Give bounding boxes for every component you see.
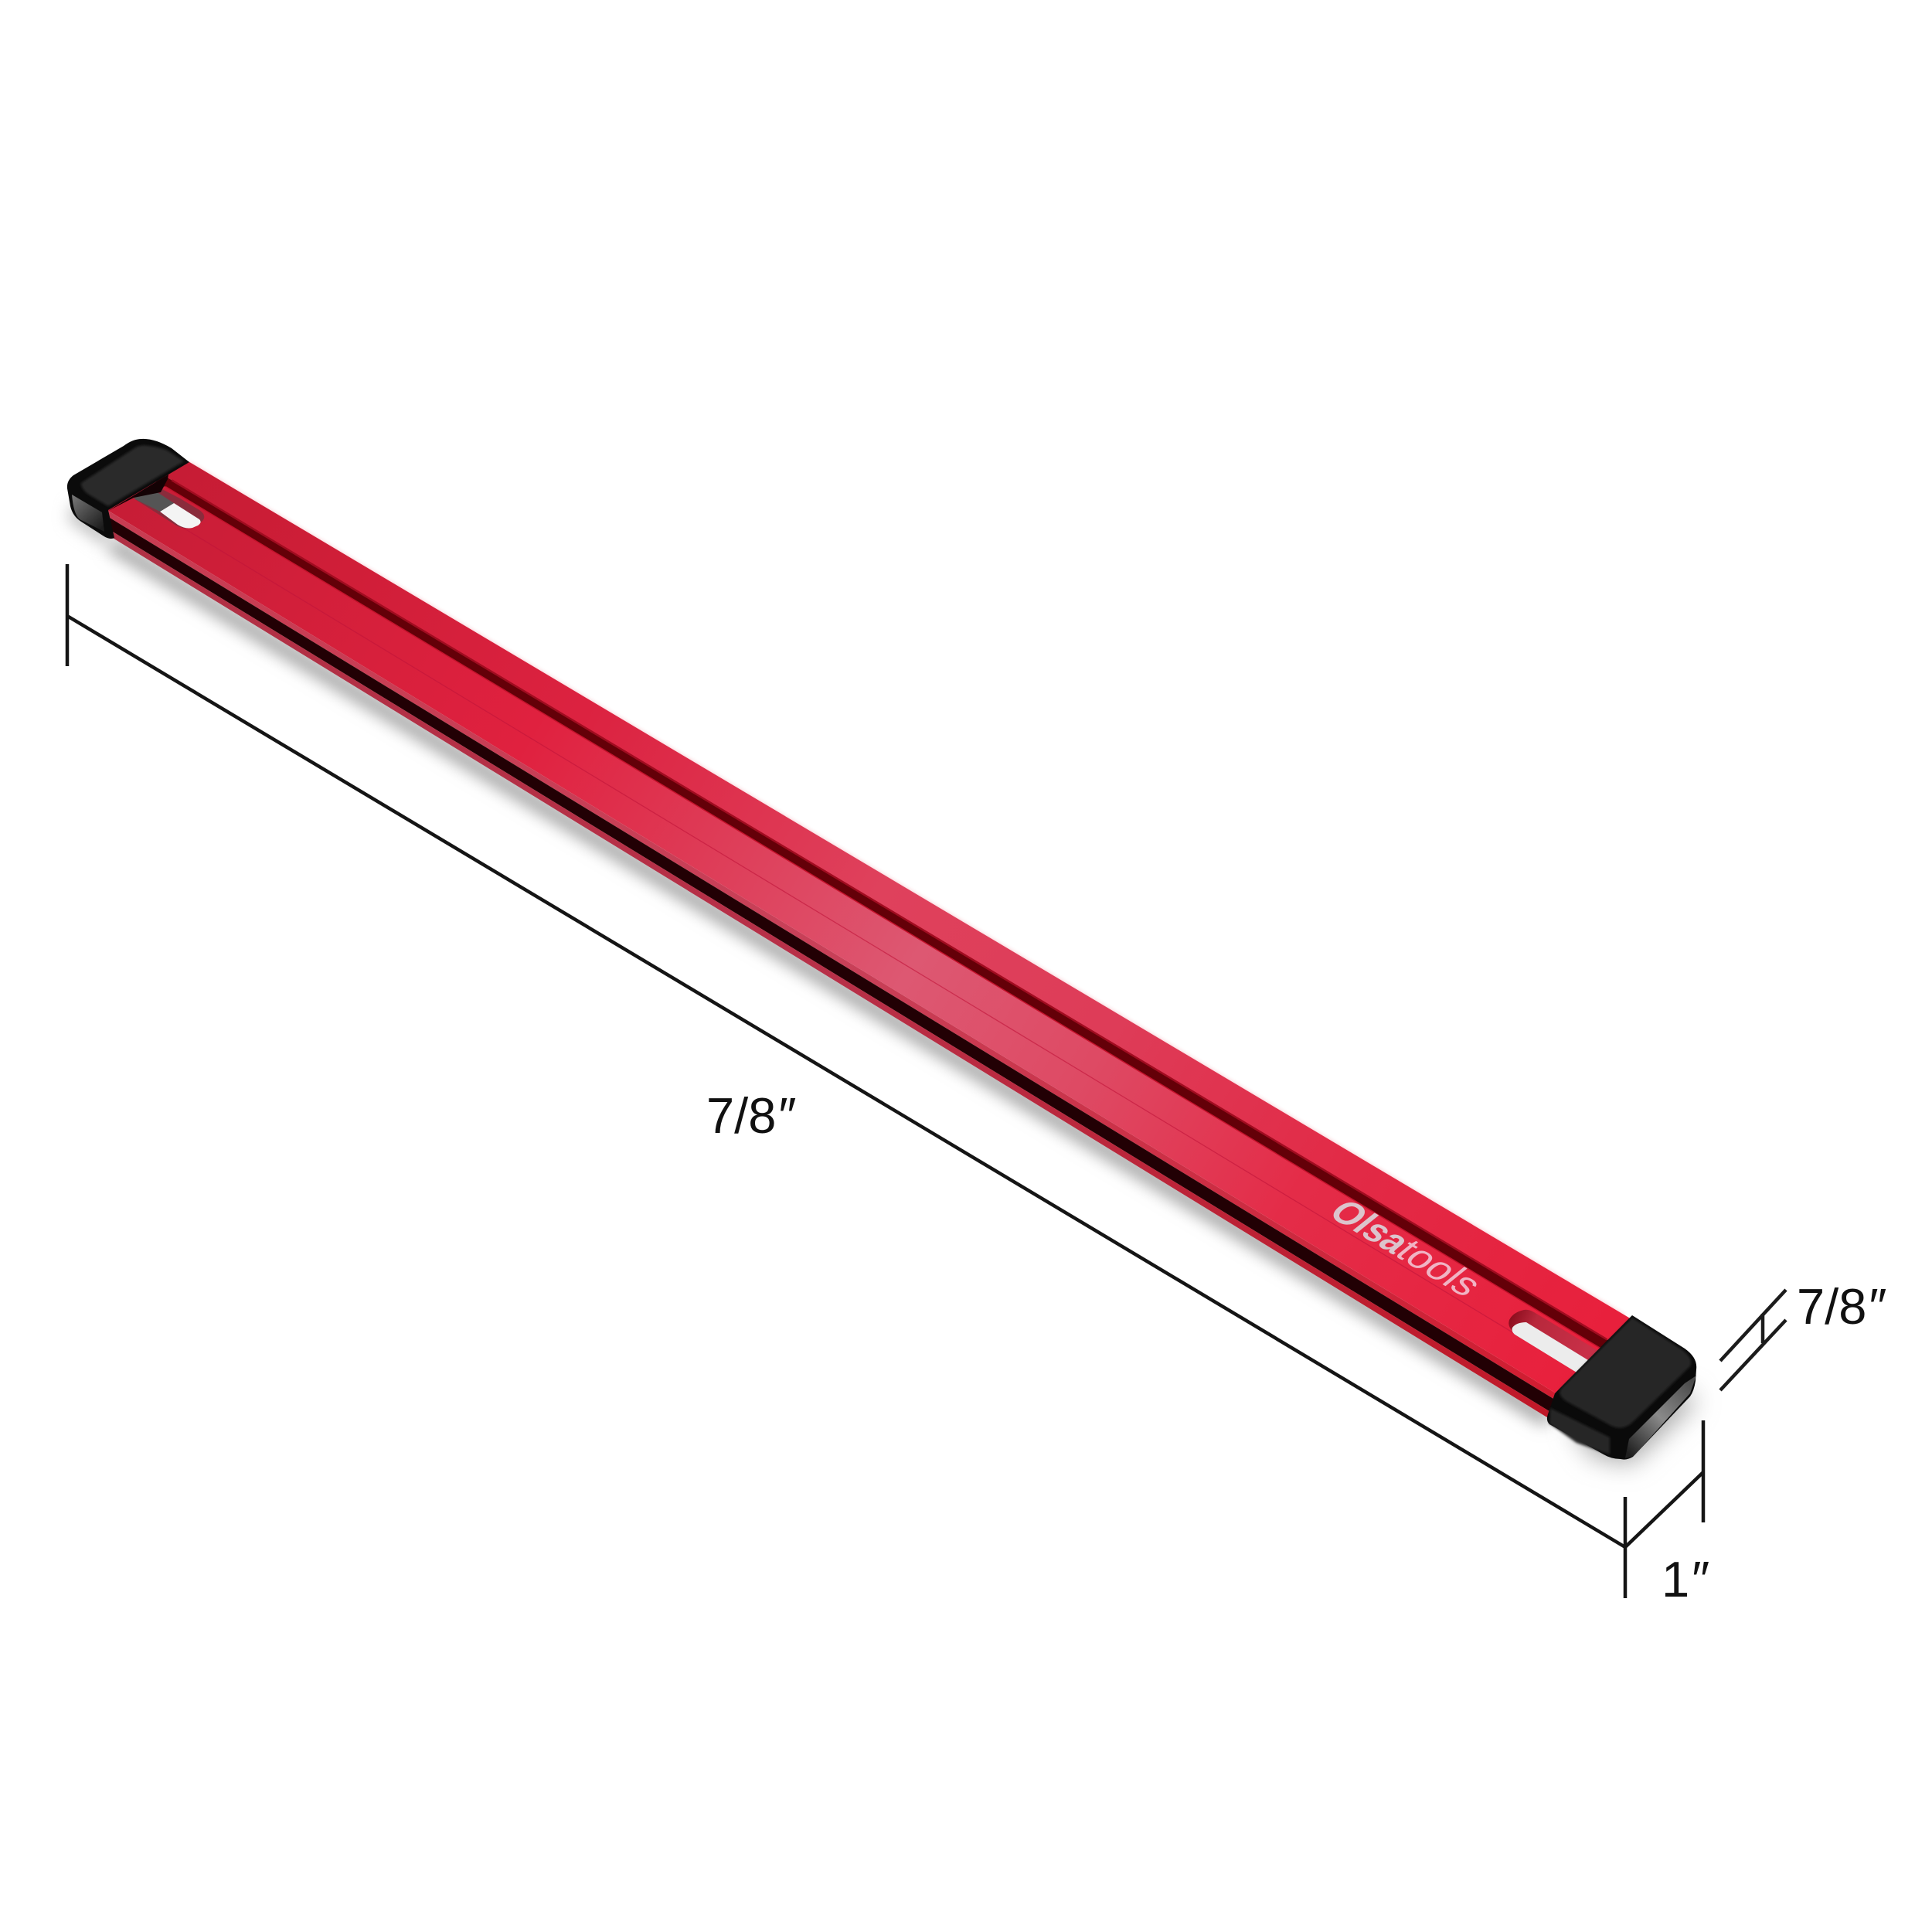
main face (106, 473, 1619, 1410)
left end cap (67, 439, 189, 539)
label: width 1 inch: 1″ (1662, 1551, 1709, 1607)
black gap (95, 513, 1579, 1424)
bar shadow (68, 462, 1696, 1464)
label: height 7/8 inch: 7/8″ (1797, 1278, 1886, 1335)
logo: Olsatools: Olsa (1320, 1193, 1421, 1260)
right end cap (1547, 1315, 1696, 1460)
dimension: height (1720, 1290, 1786, 1390)
label: length 7/8 inch: 7/8″ (706, 1087, 795, 1144)
bottom edge (91, 521, 1571, 1430)
face centre line (147, 505, 1581, 1374)
lower lip (103, 509, 1583, 1414)
top rail (148, 448, 1645, 1351)
cap contact shadow (108, 474, 168, 511)
channel groove (142, 466, 1626, 1360)
dimension: width (1625, 1420, 1703, 1598)
logo: Olsatools (1320, 1193, 1492, 1303)
right mounting slot (1509, 1310, 1604, 1377)
bar body (91, 448, 1645, 1430)
dimension: length (67, 564, 1625, 1547)
left mounting slot (134, 485, 204, 529)
logo: Olsatools: tools (1386, 1233, 1492, 1303)
product: red magnetic bar with end caps (67, 439, 1696, 1464)
